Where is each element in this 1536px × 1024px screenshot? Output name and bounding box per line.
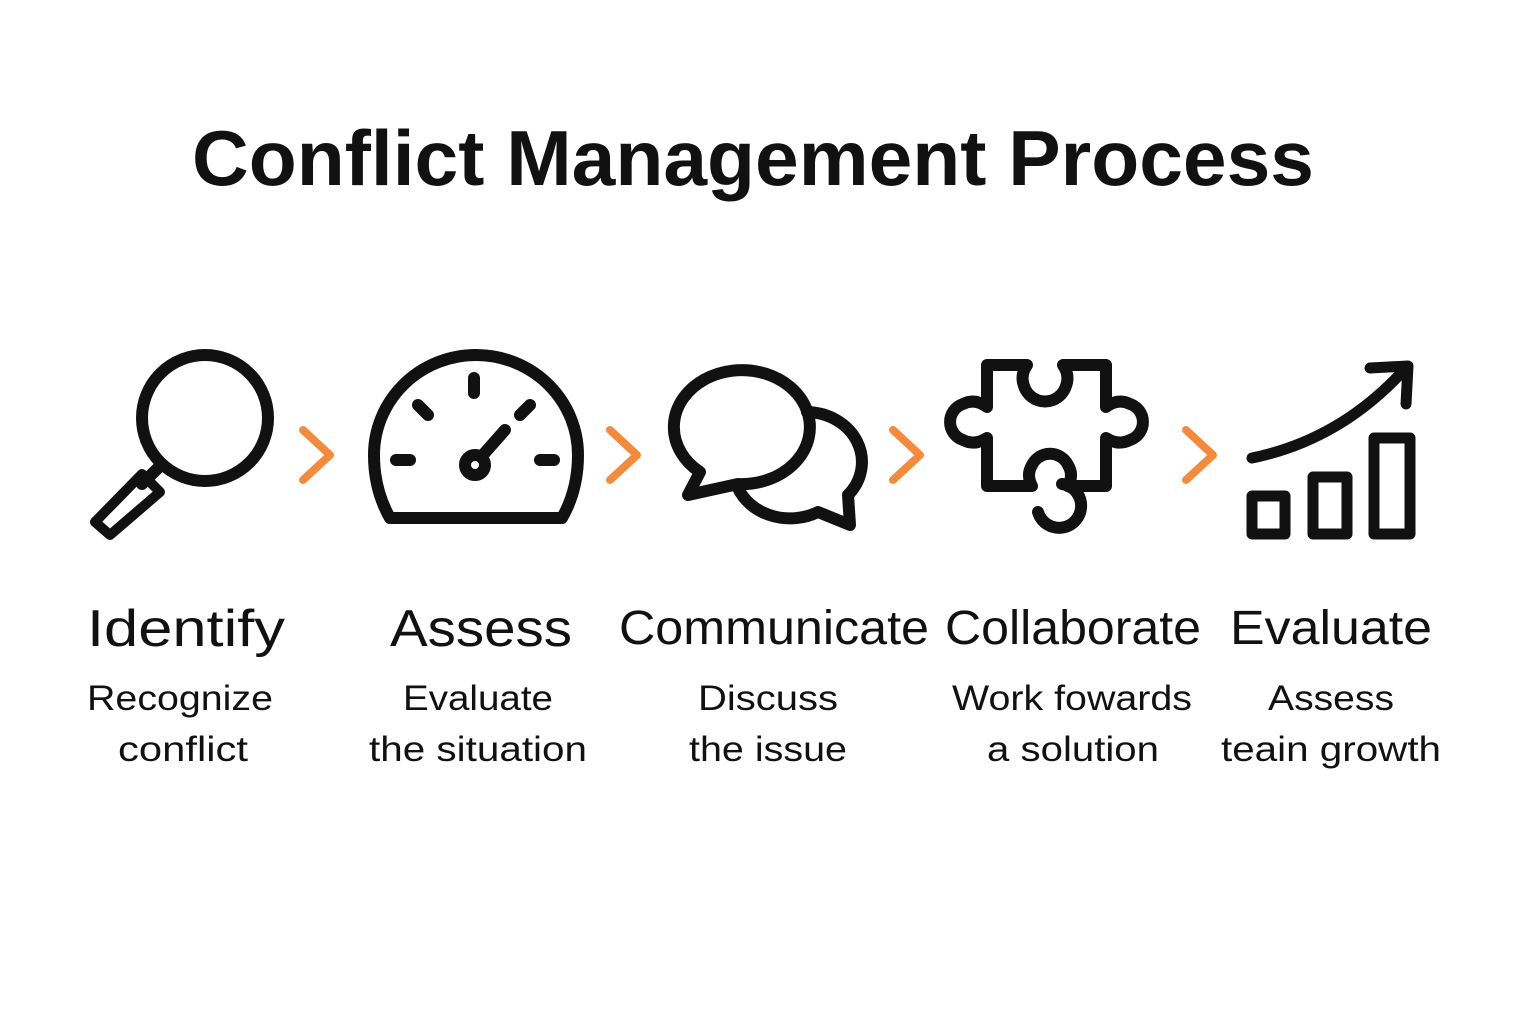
icon: growth chart — [1252, 366, 1410, 534]
step: assess: the situation — [369, 730, 587, 769]
step: collaborate: Work fowards — [952, 679, 1192, 718]
step: assess: Assess — [390, 600, 572, 658]
icon: puzzle — [950, 365, 1143, 528]
step: identify: Recognize — [87, 679, 273, 718]
step: communicate — [619, 602, 929, 769]
arrow: chevron 3 — [893, 430, 920, 480]
step: assess: Evaluate — [403, 679, 553, 718]
step: collaborate: Collaborate — [945, 602, 1201, 655]
step: identify: conflict — [118, 730, 248, 769]
step: communicate: Communicate — [619, 602, 929, 655]
step: collaborate: a solution — [987, 730, 1159, 769]
icon: gauge — [374, 355, 578, 518]
step: communicate: the issue — [689, 730, 847, 769]
step: evaluate: Evaluate — [1230, 602, 1432, 655]
arrow: chevron 1 — [303, 430, 330, 480]
icon: speech bubbles — [674, 370, 862, 525]
step: evaluate — [1221, 602, 1441, 769]
step: assess — [369, 600, 587, 769]
step: communicate: Discuss — [698, 679, 838, 718]
step: evaluate: Assess — [1268, 679, 1394, 718]
icon: magnifier — [95, 355, 268, 535]
arrow: chevron 2 — [610, 430, 637, 480]
step: identify: Identify — [87, 600, 285, 658]
step: identify — [87, 600, 285, 769]
arrow: chevron 4 — [1186, 430, 1213, 480]
step: collaborate — [945, 602, 1201, 769]
title: Conflict Management Process — [192, 114, 1314, 202]
step: evaluate: teain growth — [1221, 730, 1441, 769]
